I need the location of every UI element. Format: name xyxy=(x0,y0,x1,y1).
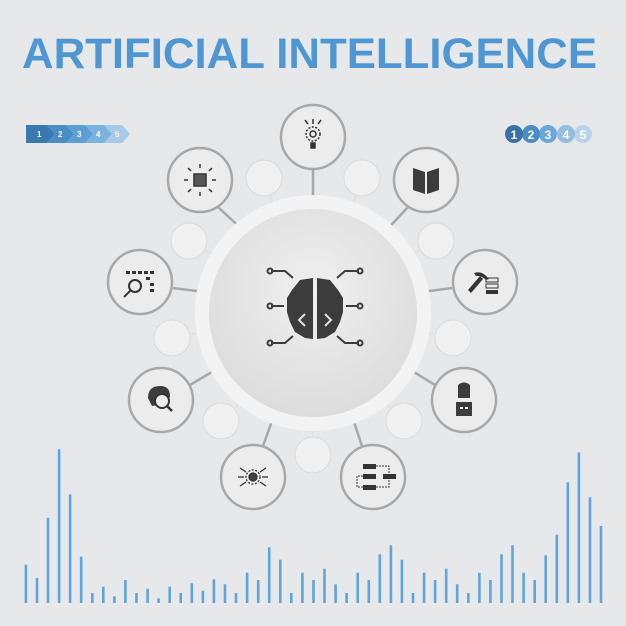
step arrows: 1 xyxy=(37,130,42,139)
icon: brain search gear xyxy=(148,386,172,411)
step arrows: 5 xyxy=(115,130,120,139)
icon: circuit brain xyxy=(268,268,362,346)
icon circles xyxy=(108,105,517,509)
icon: data grid search xyxy=(124,271,154,297)
icon: flowchart xyxy=(357,464,396,490)
step arrows: 2 xyxy=(58,130,63,139)
central circle xyxy=(209,209,417,417)
icon: robot brain xyxy=(456,382,472,416)
icon: brain network xyxy=(238,468,268,486)
step arrows xyxy=(26,125,130,143)
step arrows: 4 xyxy=(96,130,101,139)
step arrows: 3 xyxy=(77,130,82,139)
title: ARTIFICIAL INTELLIGENCE xyxy=(22,30,597,78)
icon: data mining xyxy=(468,272,498,294)
step circles: 3 xyxy=(545,128,552,142)
icon: AI chip arrows xyxy=(184,164,216,196)
step circles: 5 xyxy=(580,128,587,142)
icon: book brain xyxy=(413,168,439,194)
step circles: 4 xyxy=(563,128,570,142)
blank circles xyxy=(154,160,471,473)
icon: idea gear bulb xyxy=(305,119,321,148)
step circles xyxy=(505,125,592,143)
step circles: 1 xyxy=(511,128,518,142)
step circles: 2 xyxy=(528,128,535,142)
connectors xyxy=(173,170,452,446)
central ring xyxy=(195,195,431,431)
bar chart xyxy=(25,449,602,603)
